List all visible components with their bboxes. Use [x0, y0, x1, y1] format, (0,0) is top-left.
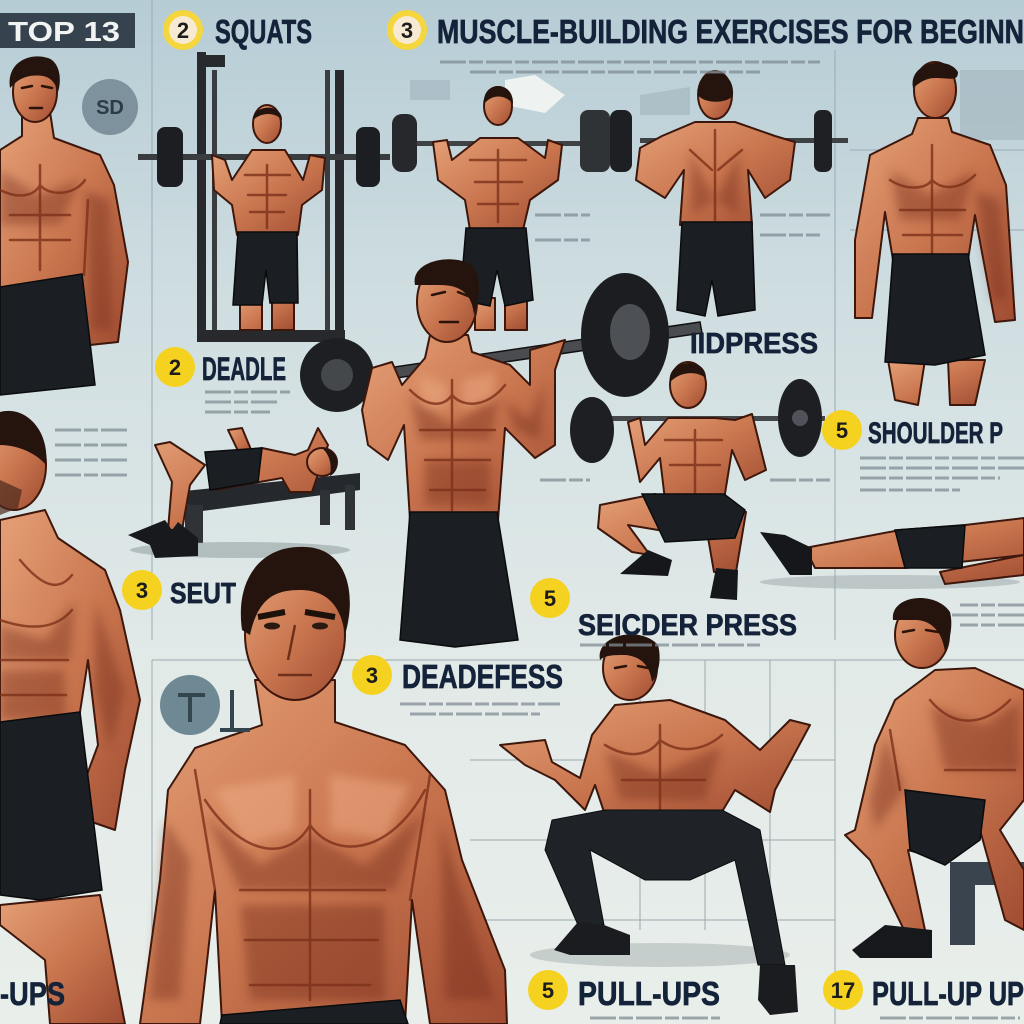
heading: 3 squats: SEUT	[170, 578, 236, 610]
figure: man from behind with barbell	[636, 71, 848, 316]
icon: badge, top left: SD	[96, 97, 124, 119]
heading: 2 deadlift: 2	[169, 355, 181, 380]
heading: 3 squats: 3	[136, 578, 148, 603]
figure: seated man, bottom right	[845, 598, 1024, 958]
heading: 3 deadlifts: 3	[366, 663, 378, 688]
icon: badge, lower left	[160, 675, 250, 735]
figure: squatting man with barbell	[570, 362, 825, 600]
icon: badge, top left	[82, 79, 138, 135]
figure: lying man on bench, left	[128, 428, 360, 558]
heading: 5 pull-ups: PULL-UPS	[578, 975, 720, 1012]
heading: 5 shoulder press: 5	[836, 418, 848, 443]
figure: big man, left	[0, 411, 140, 1024]
figure: squatting man, bottom right centre	[500, 634, 810, 1015]
figure: centre man with barbell	[300, 259, 702, 647]
heading: 5 shoulder press, centre	[530, 578, 797, 642]
heading: 2 squats: SQUATS	[215, 13, 312, 50]
figure: man with barbell, top centre	[392, 86, 632, 330]
heading: 17 pull-up	[823, 970, 1024, 1012]
heading: 2 squats	[163, 10, 312, 50]
figure: squat rack with man	[138, 52, 390, 342]
heading: pull-ups, bottom left: -UPS	[0, 976, 65, 1012]
heading: 17 pull-up: 17	[831, 978, 855, 1003]
figure: big man, centre foreground	[140, 547, 507, 1024]
heading: 3 squats	[122, 570, 236, 610]
heading: 2 deadlift: DEADLE	[202, 351, 286, 387]
title bar	[0, 13, 135, 48]
heading: 3 deadlifts: DEADEFESS	[402, 658, 563, 695]
figure: lying man, right	[760, 518, 1024, 589]
title bar: TOP 13	[8, 16, 120, 47]
heading: 2 squats: 2	[177, 18, 189, 43]
heading: 5 shoulder press, centre: SEICDER PRESS	[578, 609, 797, 642]
heading: press, centre right: IIDPRESS	[690, 328, 818, 360]
heading: 2 deadlift	[155, 347, 286, 387]
figure: standing man, top left	[0, 56, 128, 395]
heading: 5 shoulder press, centre: 5	[544, 586, 556, 611]
heading: 5 shoulder press	[822, 410, 1003, 450]
figure: standing man, top right	[855, 62, 1015, 405]
heading: main title: 3	[401, 18, 413, 43]
heading: 5 pull-ups: 5	[542, 978, 554, 1003]
heading: 5 pull-ups	[528, 970, 720, 1012]
heading: 3 deadlifts	[352, 655, 563, 695]
